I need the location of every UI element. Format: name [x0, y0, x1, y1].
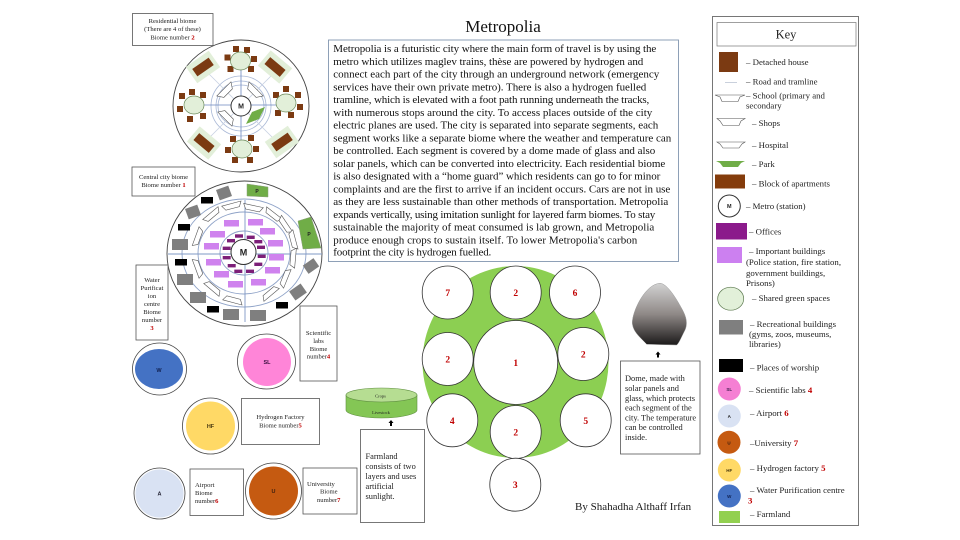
dome caption: inside. [625, 433, 647, 442]
key: offices [716, 223, 782, 240]
biome circle 2 left: 2 [445, 356, 450, 366]
key: hydrogen factory: – Hydrogen factory 5 [749, 463, 826, 473]
offices [223, 234, 266, 273]
label: hydrogen factory [242, 398, 320, 444]
key: important buildings [717, 246, 841, 288]
key: water purification centre: – Water Purification centre [749, 485, 845, 495]
key: block of apartments: – Block of apartments [751, 178, 831, 188]
key: metro: M [727, 204, 732, 210]
road-side buildings [192, 201, 298, 305]
key: scientific labs: SL [726, 387, 732, 392]
farmland caption: sunlight. [366, 492, 395, 501]
label: water purification centre: Biome [143, 309, 161, 316]
key heading [717, 22, 856, 46]
key: metro: – Metro (station) [745, 201, 806, 211]
key: school [715, 90, 826, 110]
key: hydrogen factory: HF [726, 468, 733, 473]
roads [194, 61, 286, 149]
label: university: University [307, 481, 336, 488]
label: scientific labs: Scientific [306, 330, 331, 337]
apartment blocks [186, 50, 299, 160]
key: places of worship [719, 359, 820, 372]
key panel [712, 16, 858, 526]
key: important buildings: Prisons) [746, 278, 775, 288]
biome: water purification [132, 343, 186, 395]
biome: university [246, 463, 302, 519]
key: recreational buildings: – Recreational buildings [749, 319, 837, 329]
biome: university: U [272, 489, 276, 495]
description panel: segment works like a separate biome where the weather and temperature can [333, 132, 672, 144]
biome: scientific labs: SL [263, 360, 271, 366]
dome caption: solar panels and [625, 384, 680, 393]
biome circle 2 bottom: 2 [513, 428, 518, 438]
label: water purification centre: ion [148, 293, 157, 300]
biome circle 4: 4 [450, 417, 455, 427]
label: scientific labs: Biome [310, 346, 327, 353]
label: central city biome: Central city biome [139, 174, 188, 181]
key: farmland [719, 509, 791, 523]
key: water purification centre: W [727, 494, 732, 499]
key: water purification centre [718, 484, 845, 508]
dome caption: glass, which protects [625, 394, 695, 403]
biome circle 2 top [490, 266, 541, 319]
biome: water purification: W [156, 368, 162, 374]
shops and services [217, 82, 263, 126]
biome circle 2 right: 2 [581, 350, 586, 360]
key heading: Key [776, 28, 797, 42]
description panel: as they are less sustainable than other methods of transportation. Metropolia [333, 196, 668, 208]
key: scientific labs [718, 378, 813, 400]
metro: M [238, 104, 244, 110]
biome circle 7: 7 [445, 289, 450, 299]
key: university [718, 431, 799, 454]
description panel: tramline, which is elevated with a foot path running underneath the tracks, [333, 94, 650, 106]
biome circle 2 top: 2 [513, 289, 518, 299]
description panel: sustainable the majority of meat consumed is lab grown, and Metropolia [333, 222, 654, 234]
biome circle 5 [560, 394, 611, 447]
biome circle 5: 5 [583, 417, 588, 427]
key: hospital [717, 140, 789, 150]
biome circle 7 [422, 266, 473, 319]
biome circle 1 [474, 320, 558, 404]
city map [422, 266, 611, 511]
biome circle 3: 3 [513, 481, 518, 491]
key: school: secondary [746, 100, 782, 110]
key: airport: – Airport 6 [749, 408, 789, 418]
label: central city biome [132, 167, 195, 196]
key: shared green spaces [718, 287, 830, 310]
important buildings [204, 219, 284, 288]
recreational buildings [172, 186, 319, 321]
farmland caption: layers and uses [366, 472, 416, 481]
key: block of apartments [715, 174, 831, 188]
description panel: is also designated with a “home guard” which residents can go to for minor [333, 170, 661, 182]
dome caption: each segment of the [625, 404, 692, 412]
key: important buildings: – Important buildings [748, 246, 826, 256]
label: water purification centre [136, 265, 168, 340]
biome: airport [134, 468, 185, 519]
description panel: services have their own private metro). There is also a hydrogen fuelled [333, 82, 647, 94]
biome circle 3 [490, 458, 541, 511]
dome [632, 283, 686, 345]
dome caption: can be controlled [625, 423, 683, 432]
parks: P [255, 189, 259, 195]
description panel: Metropolia is a futuristic city where the main form of travel is by using the [333, 43, 656, 55]
description panel: connect each part of the city through an underground network (emergency [333, 68, 660, 80]
label: airport: Airport [195, 482, 215, 489]
key: scientific labs: – Scientific labs 4 [748, 385, 813, 395]
detached houses [177, 46, 303, 163]
key: airport: A [728, 414, 732, 419]
farmland caption: Farmland [366, 452, 398, 461]
description panel: expands vertically, using imitation sunlight for layered farm biomes. To stay [333, 209, 656, 221]
diagram: central city biome [167, 181, 322, 326]
arrow: farmland [388, 420, 394, 426]
label: residential biome: Biome number 2 [150, 34, 195, 42]
biome circle 1: 1 [513, 359, 518, 369]
key: important buildings: government buildings, [746, 268, 825, 278]
dome caption: Dome, made with [625, 374, 686, 383]
label: airport: Biome [195, 490, 213, 497]
key: park [716, 159, 775, 169]
description panel: electric planes are used. The city is separated into separate segments, each [333, 120, 659, 132]
label: water purification centre: Purificat [141, 285, 164, 292]
biome: airport: A [158, 492, 162, 498]
label: hydrogen factory: Biome number5 [259, 422, 303, 430]
farmland caption: artificial [366, 482, 395, 491]
biome circle 2 bottom [490, 406, 541, 458]
key: shops: – Shops [751, 118, 781, 128]
key: airport [718, 404, 789, 428]
biome: hydrogen factory [182, 398, 238, 454]
label: airport [190, 469, 244, 516]
places of worship [175, 197, 288, 312]
label: residential biome: Residential biome [149, 18, 196, 25]
description panel: complaints and are the first to arrive if an incident occurs. Cars are not in use [333, 184, 670, 196]
shared green spaces [184, 52, 296, 158]
key: university: –University 7 [749, 438, 799, 448]
description panel: be controlled. Each segment is covered by a dome made of glass and also [333, 145, 656, 157]
dome caption [620, 361, 700, 454]
label: water purification centre: number [142, 317, 163, 324]
key: recreational buildings [719, 319, 837, 349]
key: shared green spaces: – Shared green spaces [751, 293, 830, 303]
author credit: By Shahadha Althaff Irfan [575, 501, 692, 513]
metro: M [240, 248, 247, 258]
label: university: Biome [320, 488, 338, 496]
key: detached house: – Detached house [745, 57, 809, 67]
biome circle 6 [550, 266, 600, 319]
label: university: number7 [317, 497, 341, 504]
description panel: produce enough crops to sustain itself. To lower Metropolia's carbon [333, 234, 638, 246]
description panel: solar panels, which can be converted into electricity. Each residential biome [333, 158, 665, 170]
parks: P [307, 232, 311, 238]
label: central city biome: Biome number 1 [141, 182, 186, 189]
label: hydrogen factory: Hydrogen Factory [256, 414, 305, 421]
key: university: U [727, 440, 731, 445]
key: water purification centre: 3 [748, 496, 753, 506]
description panel: with numerous stops around the city. To access places outside of the city [333, 107, 653, 119]
label: scientific labs [300, 306, 337, 381]
label: scientific labs: labs [313, 338, 324, 345]
key: park: – Park [751, 159, 775, 169]
description panel: footprint the city is hydrogen fuelled. [333, 246, 492, 258]
biome: hydrogen factory: HF [207, 424, 215, 430]
diagram: residential biome [173, 40, 309, 172]
biome: scientific labs [238, 334, 296, 389]
farmland cylinder: Crops [375, 394, 386, 398]
label: residential biome: (There are 4 of these) [144, 26, 201, 33]
label: scientific labs: number4 [307, 354, 331, 360]
key: farmland: – Farmland [749, 509, 791, 519]
key: places of worship: – Places of worship [749, 362, 820, 372]
label: university [303, 468, 357, 514]
key: school: – School (primary and [745, 90, 826, 100]
key: detached house [719, 52, 809, 72]
label: residential biome [132, 14, 213, 46]
rings and roads [168, 199, 322, 322]
key: offices: – Offices [748, 226, 782, 236]
park [246, 107, 265, 124]
biome circle 2 left [422, 332, 473, 386]
metro [231, 240, 256, 264]
key: important buildings: (Police station, fire station, [746, 257, 841, 267]
label: water purification centre: 3 [150, 325, 154, 332]
key: shops [717, 118, 781, 128]
key: recreational buildings: libraries) [749, 339, 781, 349]
arrow: dome [656, 352, 660, 358]
title: Metropolia [465, 17, 541, 36]
dome caption: city. The temperature [625, 414, 696, 422]
farmland cylinder [346, 388, 417, 418]
key: hospital: – Hospital [751, 140, 789, 150]
label: airport: number6 [195, 498, 219, 505]
biome circle 6: 6 [573, 289, 578, 299]
parks [247, 184, 321, 249]
description panel [328, 40, 678, 262]
farmland caption: consists of two [366, 462, 416, 471]
key: road and tramline: – Road and tramline [745, 76, 818, 86]
farmland cylinder: Livestock [372, 410, 391, 415]
key: hydrogen factory [718, 458, 826, 482]
farmland caption [360, 430, 424, 522]
description panel: metro which utilizes maglev trains, thèse are powered by hydrogen and [333, 56, 644, 68]
biome circle 4 [427, 394, 478, 447]
label: water purification centre: centre [144, 301, 160, 308]
biome circle 2 right [558, 328, 609, 380]
key: metro [718, 195, 806, 217]
label: water purification centre: Water [144, 277, 161, 284]
key: recreational buildings: (gyms, zoos, museums, [749, 329, 831, 339]
